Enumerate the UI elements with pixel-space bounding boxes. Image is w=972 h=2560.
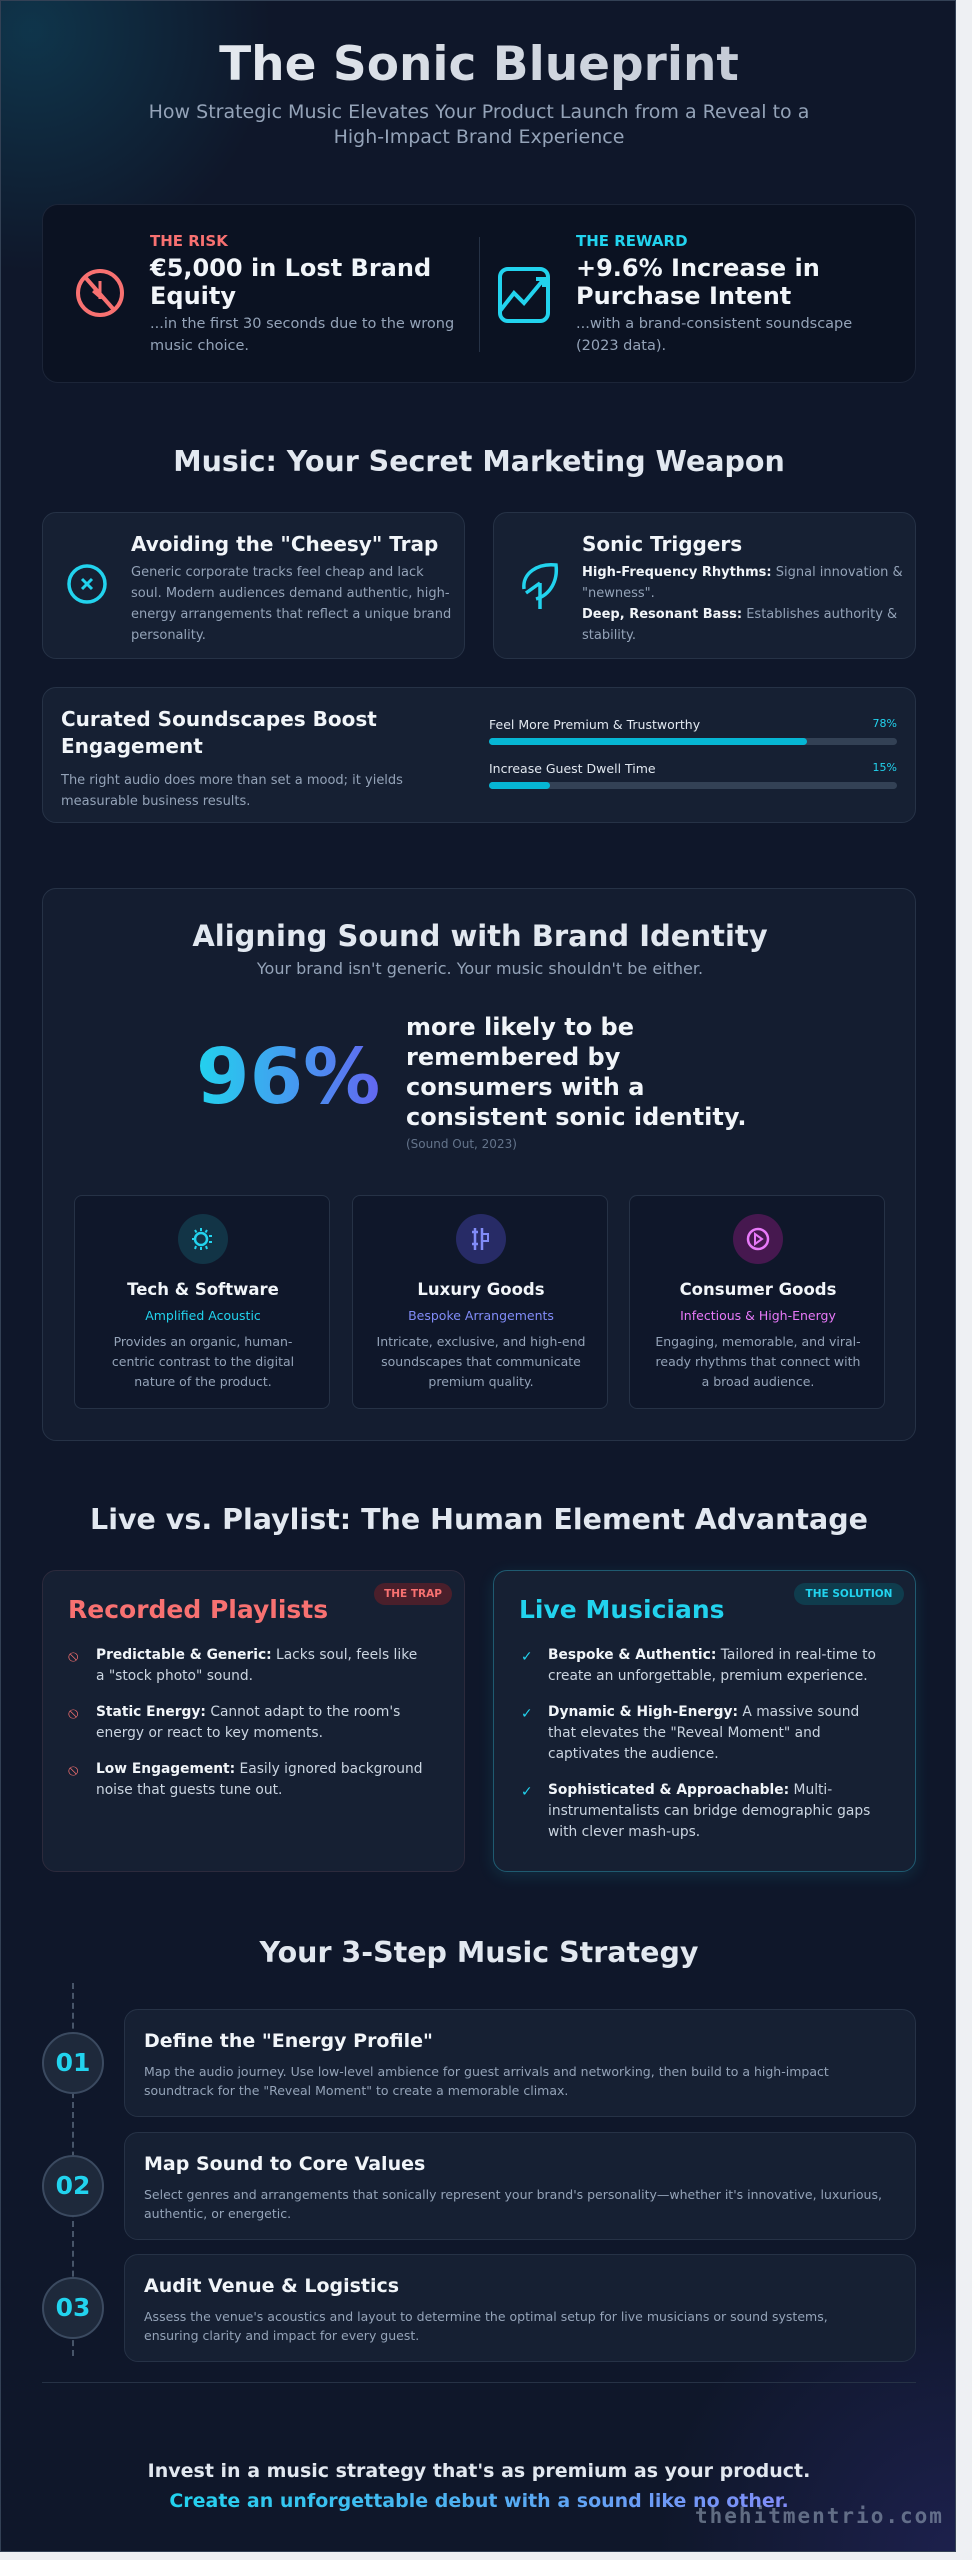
text: risk: THE RISK (150, 232, 228, 250)
heading: live vs playlist: Live vs. Playlist: The Human Element Advantage (90, 1503, 868, 1536)
step 3: 03 (56, 2293, 90, 2322)
subcard: tech (74, 1195, 330, 1409)
bar chart: 78% (873, 717, 897, 730)
subcard: tech: Tech & Software (127, 1280, 279, 1299)
panel: sonic triggers: High-Frequency Rhythms: Signal innovation & "newness". (582, 565, 903, 601)
CTA: Invest in a music strategy that's as premium as your product. (148, 2460, 810, 2482)
stat text: more likely to be remembered by consumers with a consistent sonic identity. (406, 1013, 746, 1131)
list: live pros: ✓ (521, 1649, 533, 1665)
step 3: Assess the venue's acoustics and layout to determine the optimal setup for live musicians or sound systems, ensuring clarity and impact for every guest. (144, 2309, 828, 2343)
step 2: Map Sound to Core Values (144, 2153, 425, 2175)
panel: cheesy trap: soul. Modern audiences demand authentic, high- (131, 586, 450, 601)
CTA (148, 2460, 810, 2512)
panel: live musicians: Live Musicians (519, 1595, 725, 1624)
badge: the trap: THE TRAP (384, 1588, 442, 1600)
step 2: Select genres and arrangements that sonically represent your brand's personality—whether it's innovative, luxurious, authentic, or energetic. (144, 2187, 882, 2221)
list: live pros (521, 1647, 876, 1840)
badge: the trap (374, 1583, 452, 1605)
icon: sliders (456, 1214, 506, 1264)
subtitle: How Strategic Music Elevates Your Product Launch from a Reveal to a High-Impact Brand Experience (149, 101, 809, 148)
panel: recorded playlists: Recorded Playlists (68, 1595, 328, 1624)
panel: sonic triggers (493, 512, 916, 659)
panel: brand identity: Your brand isn't generic. Your music shouldn't be either. (257, 959, 703, 978)
subcard: consumer (629, 1195, 885, 1409)
icon: risk (76, 269, 124, 317)
panel: curated soundscapes: Engagement (61, 734, 203, 758)
panel: curated soundscapes: The right audio does more than set a mood; it yields measurable business results. (61, 773, 403, 809)
panel: cheesy trap: Generic corporate tracks feel cheap and lack (131, 565, 424, 580)
list: playlist cons: ⦸ (68, 1703, 78, 1722)
icon: play (733, 1214, 783, 1264)
bar chart: Feel More Premium & Trustworthy (489, 717, 700, 732)
icon: leaf arrow (522, 563, 558, 609)
list: playlist cons: Low Engagement: Easily ignored background noise that guests tune out. (96, 1761, 422, 1798)
step 1: 01 (56, 2048, 90, 2077)
text: risk: ...in the first 30 seconds due to the wrong music choice. (150, 316, 454, 354)
subcard: consumer: Engaging, memorable, and viral-ready rhythms that connect with a broad audience. (655, 1334, 861, 1389)
icon: tech (178, 1214, 228, 1264)
step 1 (42, 2009, 916, 2117)
bar chart: Increase Guest Dwell Time (489, 761, 656, 776)
badge: the solution (794, 1583, 904, 1605)
subcard: luxury: Luxury Goods (417, 1280, 545, 1299)
list: playlist cons: ⦸ (68, 1646, 78, 1665)
timeline line (72, 1983, 74, 2356)
step 3: Audit Venue & Logistics (144, 2275, 399, 2297)
text: reward: ...with a brand-consistent soundscape (2023 data). (576, 316, 852, 354)
panel: curated soundscapes (42, 687, 916, 823)
list: playlist cons: Predictable & Generic: Lacks soul, feels like a "stock photo" sound. (96, 1647, 417, 1684)
stat: 96%: 96% (196, 1033, 380, 1122)
step 1: Map the audio journey. Use low-level ambience for guest arrivals and networking, then build to a high-impact soundtrack for the "Reveal Moment" to create a memorable climax. (144, 2064, 829, 2098)
panel: cheesy trap (42, 512, 465, 659)
list: playlist cons: Static Energy: Cannot adapt to the room's energy or react to key moments. (96, 1704, 400, 1741)
subcard: luxury: Intricate, exclusive, and high-end soundscapes that communicate premium quality. (377, 1334, 585, 1389)
step 3 (42, 2254, 916, 2362)
text: risk (150, 232, 454, 354)
text: reward (576, 232, 852, 354)
list: live pros: Dynamic & High-Energy: A massive sound that elevates the "Reveal Moment" and captivates the audience. (548, 1704, 859, 1762)
title (1, 37, 957, 92)
panel: sonic triggers: Sonic Triggers (582, 532, 742, 556)
list: live pros: ✓ (521, 1784, 533, 1800)
text: reward: +9.6% Increase in Purchase Intent (576, 254, 820, 310)
CTA: Create an unforgettable debut with a sound like no other. (169, 2490, 789, 2512)
bar chart: 15% (873, 761, 897, 774)
panel: sonic triggers: Deep, Resonant Bass: Establishes authority & stability. (582, 607, 897, 643)
subcard: consumer: Infectious & High-Energy (680, 1308, 836, 1323)
watermark: thehitmentrio.com (695, 2504, 944, 2528)
text: risk: €5,000 in Lost Brand Equity (150, 254, 431, 310)
subcard: tech: Provides an organic, human-centric contrast to the digital nature of the product. (112, 1334, 294, 1389)
panel: brand identity (42, 888, 916, 1441)
text: reward: THE REWARD (576, 232, 688, 250)
panel: risk and reward (42, 204, 916, 383)
step 1: Define the "Energy Profile" (144, 2030, 433, 2052)
title: The Sonic Blueprint (219, 37, 739, 92)
subcard: consumer: Consumer Goods (680, 1280, 836, 1299)
panel: live musicians (493, 1570, 916, 1872)
panel: cheesy trap: Avoiding the "Cheesy" Trap (131, 532, 438, 556)
list: playlist cons: ⦸ (68, 1760, 78, 1779)
subcard: tech: Amplified Acoustic (145, 1308, 261, 1323)
panel: recorded playlists (42, 1570, 465, 1872)
step 2 (42, 2132, 916, 2240)
heading: Aligning Sound with Brand Identity (192, 919, 768, 953)
step 2: 02 (56, 2171, 90, 2200)
list: live pros: Sophisticated & Approachable: Multi-instrumentalists can bridge demographic gaps with clever mash-ups. (548, 1782, 870, 1840)
list: live pros: ✓ (521, 1706, 533, 1722)
panel: curated soundscapes: Curated Soundscapes Boost (61, 707, 377, 731)
panel: cheesy trap: personality. (131, 628, 206, 643)
subcard: luxury: Bespoke Arrangements (408, 1308, 554, 1323)
subcard: luxury (352, 1195, 608, 1409)
list: playlist cons (68, 1646, 422, 1798)
panel: cheesy trap: energy arrangements that reflect a unique brand (131, 607, 451, 622)
bar chart (489, 717, 897, 789)
list: live pros: Bespoke & Authentic: Tailored in real-time to create an unforgettable, premium experience. (548, 1647, 876, 1684)
heading: 3-step strategy: Your 3-Step Music Strategy (260, 1936, 698, 1969)
icon: x circle (67, 564, 107, 604)
badge: the solution: THE SOLUTION (806, 1588, 892, 1600)
stat text: (Sound Out, 2023) (406, 1137, 517, 1151)
heading: secret weapon: Music: Your Secret Marketing Weapon (173, 445, 785, 478)
icon: reward chart (498, 267, 550, 323)
